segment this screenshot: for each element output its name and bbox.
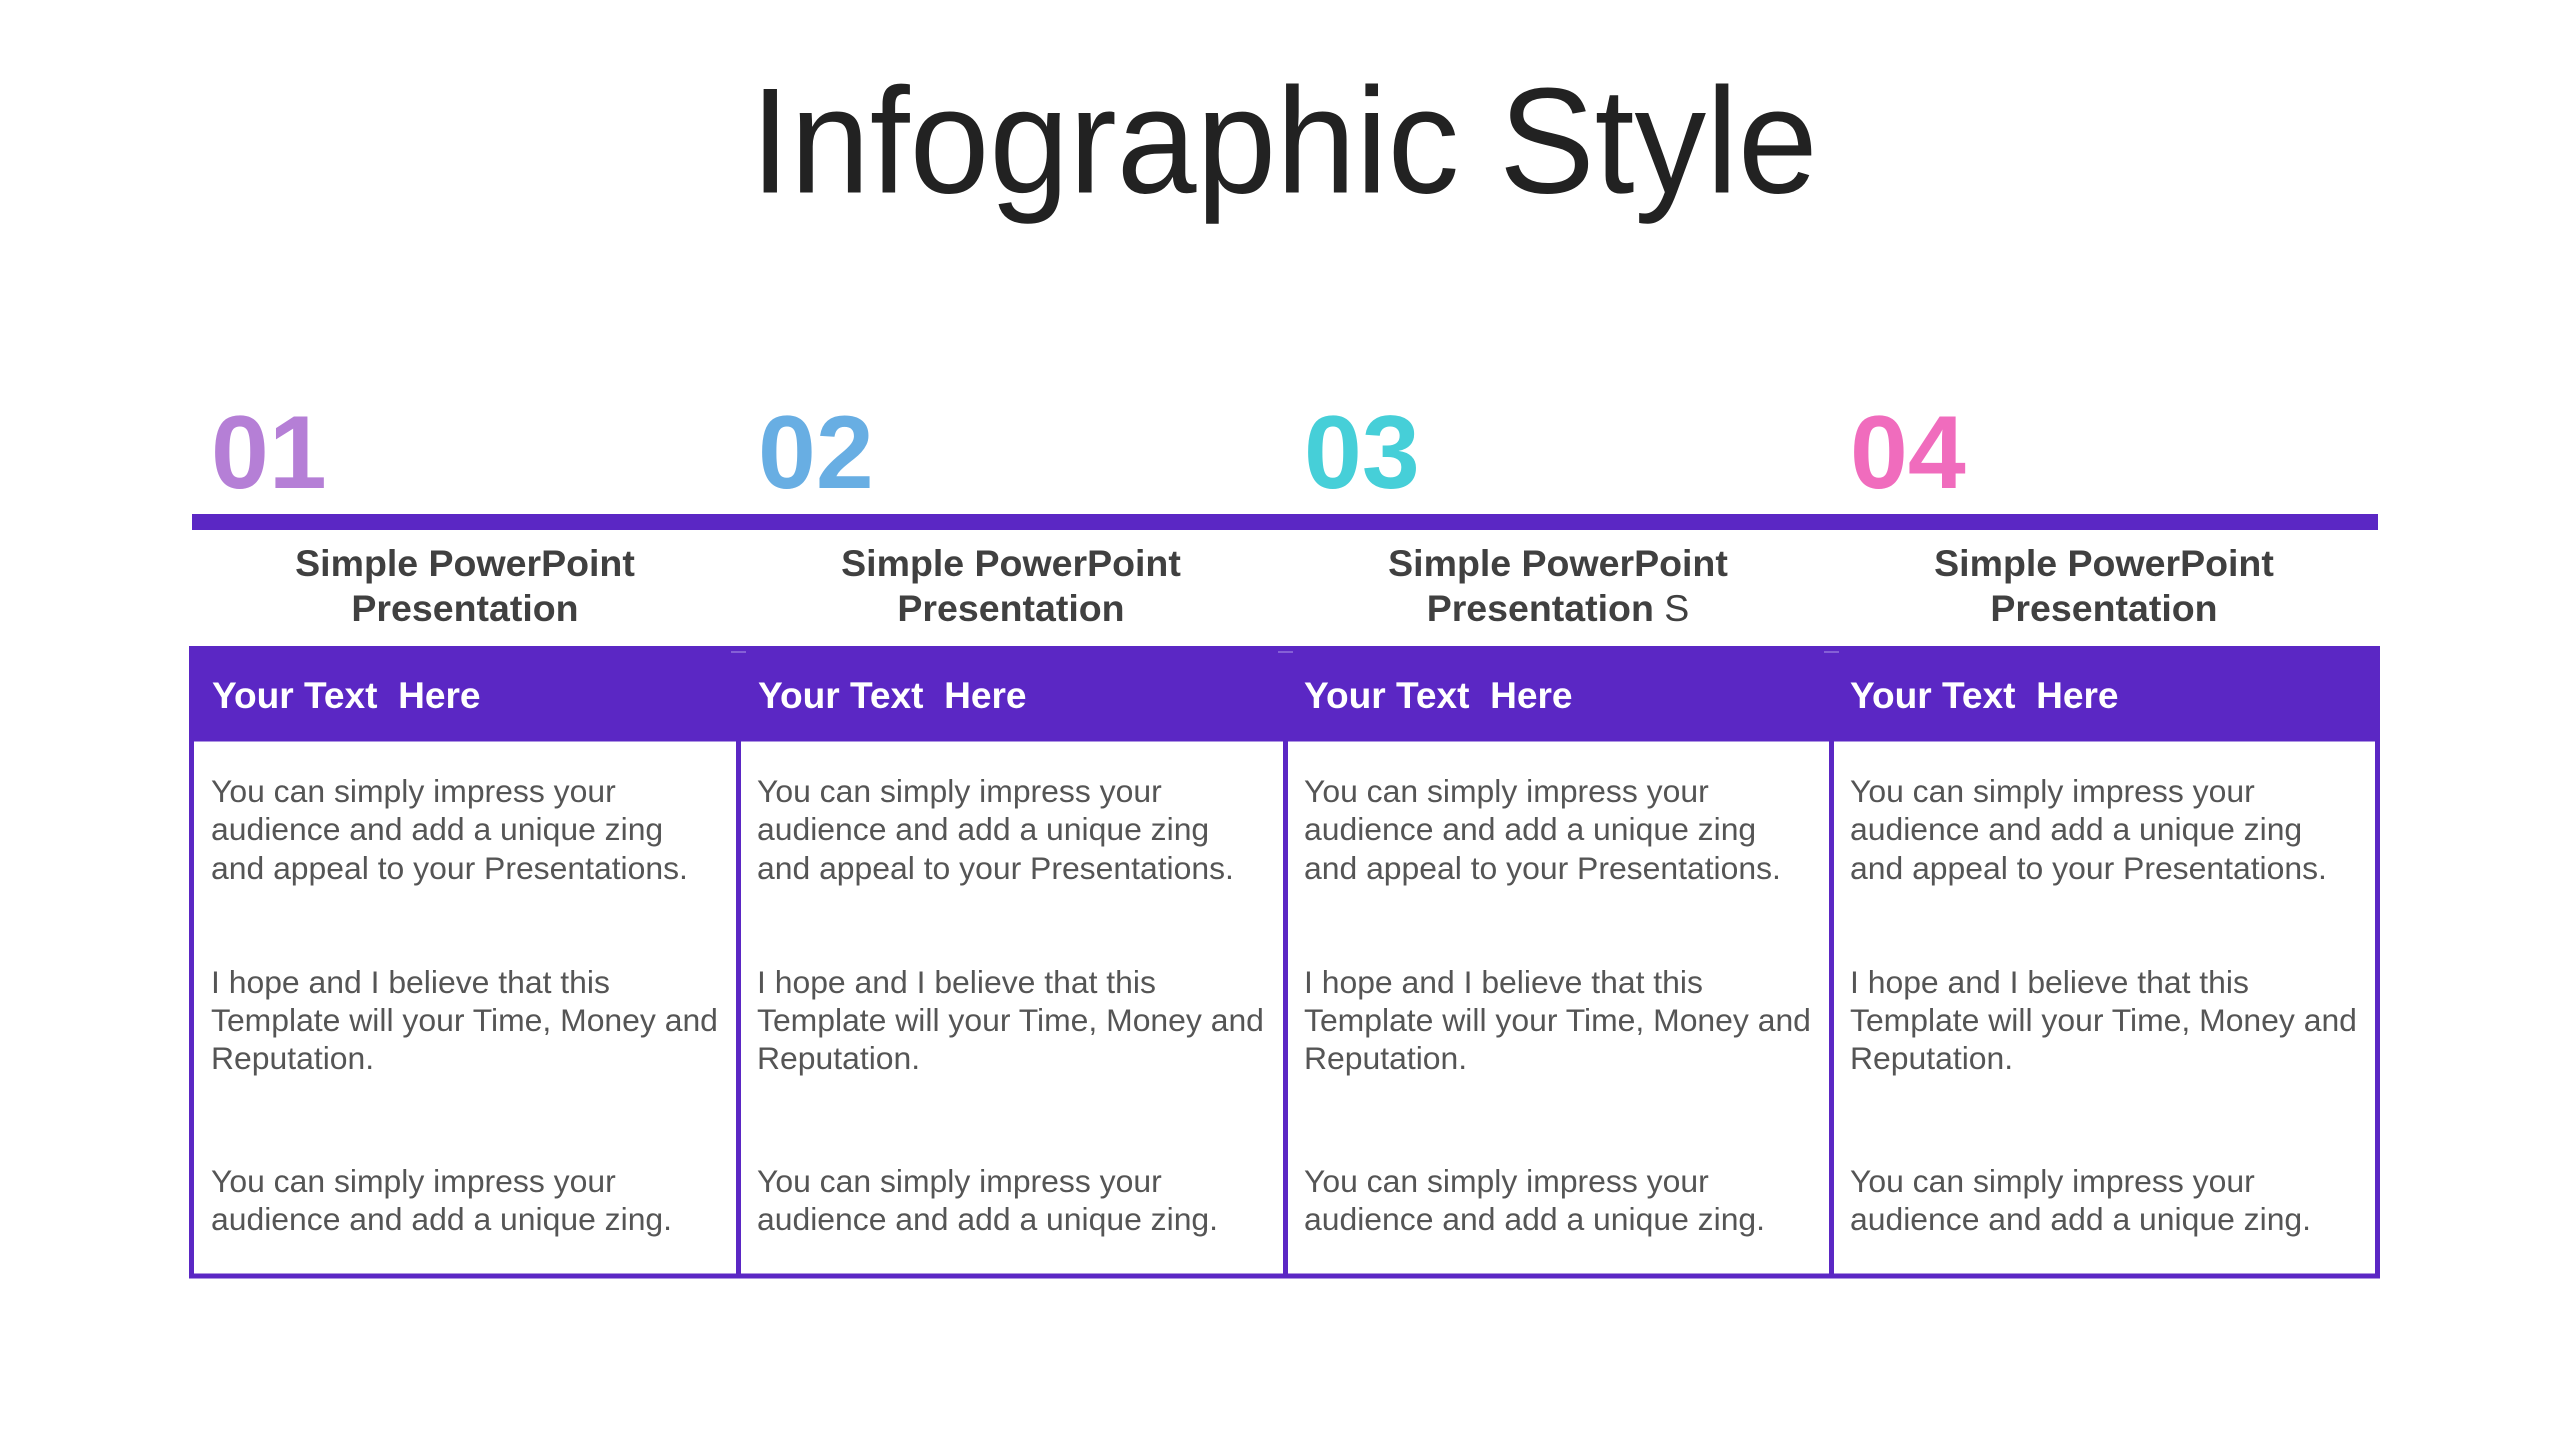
top rule xyxy=(192,514,2378,530)
column 2 xyxy=(757,395,1264,1237)
header text 2: Your Text Here xyxy=(758,674,1027,716)
body text 3: You can simply impress your xyxy=(1304,773,1709,809)
subtitle 3: Simple PowerPoint xyxy=(1388,542,1728,584)
body text 4: I hope and I believe that this xyxy=(1850,964,2249,1000)
column 1 xyxy=(211,395,718,1237)
body text 1: You can simply impress your xyxy=(211,1163,616,1199)
body text 1: You can simply impress your xyxy=(211,773,616,809)
header text 1: Your Text Here xyxy=(212,674,481,716)
body text 3: audience and add a unique zing xyxy=(1304,811,1756,847)
body text 2: You can simply impress your xyxy=(757,1163,1162,1199)
subtitle 4: Presentation xyxy=(1990,587,2218,629)
subtitle 2: Presentation xyxy=(897,587,1125,629)
outer border xyxy=(192,739,2378,1276)
body text 2: audience and add a unique zing xyxy=(757,811,1209,847)
divider 1 xyxy=(736,739,741,1278)
header text 4: Your Text Here xyxy=(1850,674,2119,716)
column 3 xyxy=(1304,395,1811,1237)
body text 1: audience and add a unique zing xyxy=(211,811,663,847)
divider 3 xyxy=(1829,739,1834,1278)
body text 1: and appeal to your Presentations. xyxy=(211,850,688,886)
title: Infographic Style xyxy=(750,57,1818,225)
header seam marks xyxy=(731,651,1839,653)
number 04: 04 xyxy=(1850,395,1966,511)
body text 4: You can simply impress your xyxy=(1850,773,2255,809)
body text 1: Template will your Time, Money and xyxy=(211,1002,718,1038)
body text 1: I hope and I believe that this xyxy=(211,964,610,1000)
body text 2: Reputation. xyxy=(757,1040,920,1076)
body text 1: audience and add a unique zing. xyxy=(211,1201,672,1237)
body text 1: Reputation. xyxy=(211,1040,374,1076)
table frame xyxy=(189,646,2380,1278)
subtitle 3: Presentation S xyxy=(1427,587,1689,629)
body text 3: Template will your Time, Money and xyxy=(1304,1002,1811,1038)
subtitle 1: Simple PowerPoint xyxy=(295,542,635,584)
body text 4: You can simply impress your xyxy=(1850,1163,2255,1199)
body text 4: audience and add a unique zing xyxy=(1850,811,2302,847)
body text 4: audience and add a unique zing. xyxy=(1850,1201,2311,1237)
header text 3: Your Text Here xyxy=(1304,674,1573,716)
subtitle 2: Simple PowerPoint xyxy=(841,542,1181,584)
body text 4: Template will your Time, Money and xyxy=(1850,1002,2357,1038)
body text 2: and appeal to your Presentations. xyxy=(757,850,1234,886)
body text 4: Reputation. xyxy=(1850,1040,2013,1076)
column 4 xyxy=(1850,395,2357,1237)
number 01: 01 xyxy=(211,395,327,511)
body text 3: Reputation. xyxy=(1304,1040,1467,1076)
body text 2: You can simply impress your xyxy=(757,773,1162,809)
subtitle 4: Simple PowerPoint xyxy=(1934,542,2274,584)
subtitle 1: Presentation xyxy=(351,587,579,629)
body text 4: and appeal to your Presentations. xyxy=(1850,850,2327,886)
body text 3: and appeal to your Presentations. xyxy=(1304,850,1781,886)
body text 2: Template will your Time, Money and xyxy=(757,1002,1264,1038)
number 03: 03 xyxy=(1304,395,1420,511)
divider 2 xyxy=(1283,739,1288,1278)
body text 3: You can simply impress your xyxy=(1304,1163,1709,1199)
body text 3: audience and add a unique zing. xyxy=(1304,1201,1765,1237)
body text 2: I hope and I believe that this xyxy=(757,964,1156,1000)
body text 2: audience and add a unique zing. xyxy=(757,1201,1218,1237)
number 02: 02 xyxy=(758,395,874,511)
body text 3: I hope and I believe that this xyxy=(1304,964,1703,1000)
header band xyxy=(189,646,2380,739)
